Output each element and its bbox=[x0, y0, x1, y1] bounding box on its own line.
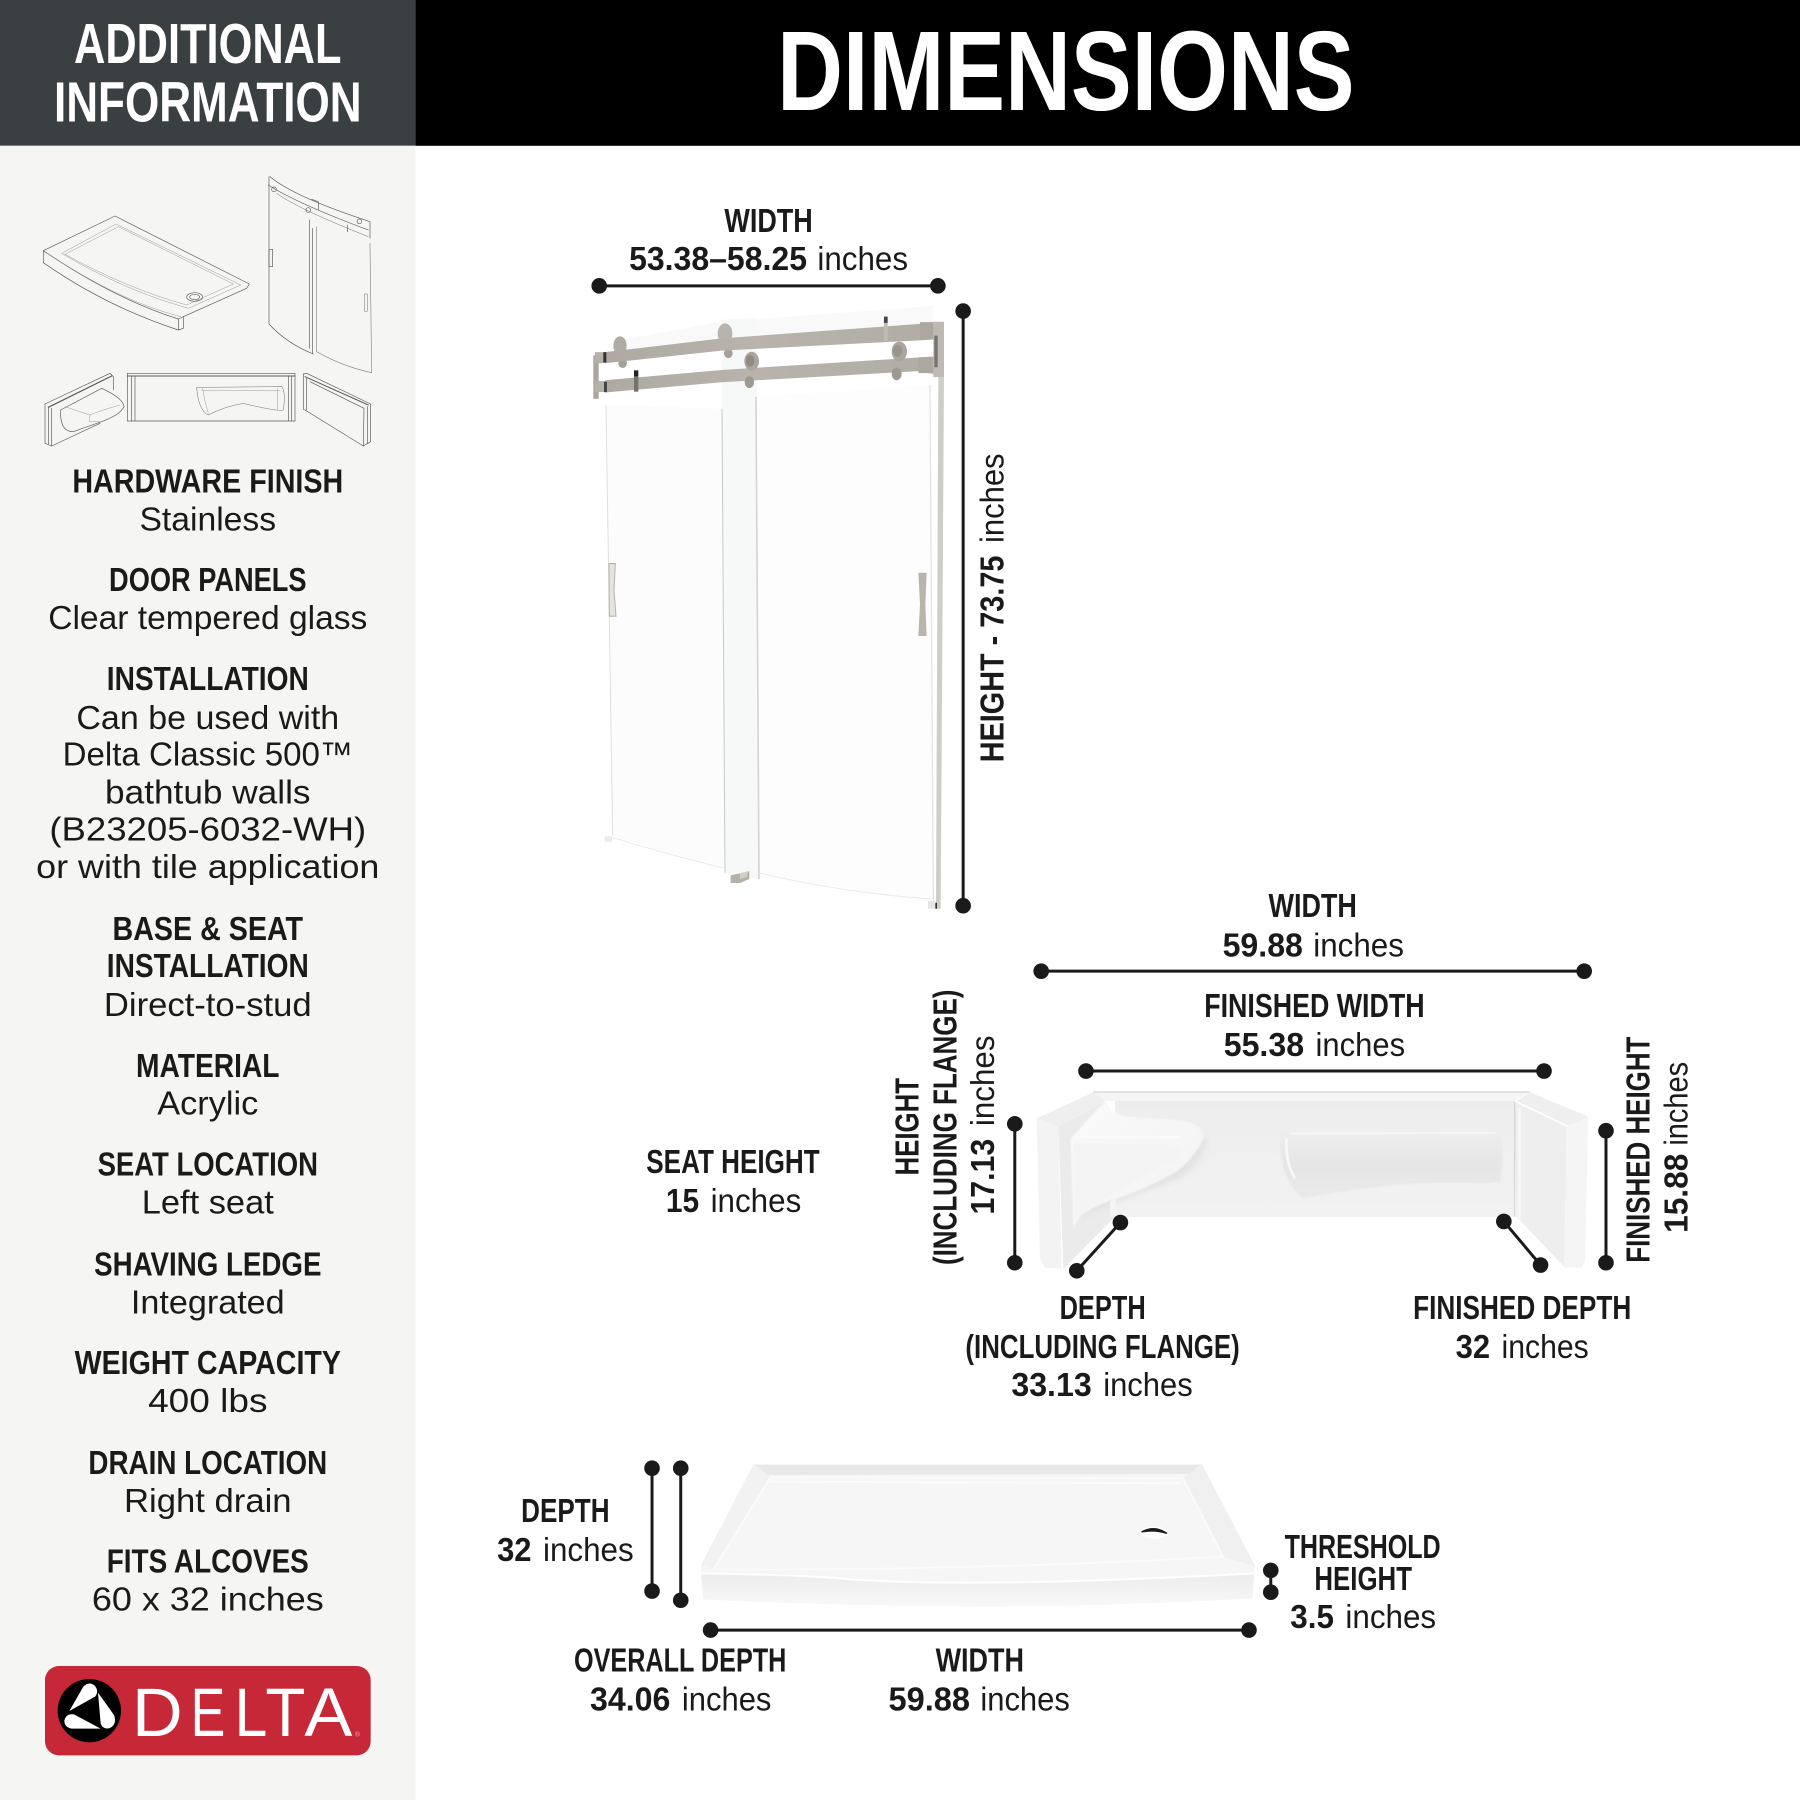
dimension: threshold height: THRESHOLD bbox=[1285, 1529, 1441, 1566]
info: installation: bathtub walls bbox=[105, 775, 311, 812]
dimension: finished height: inches bbox=[1658, 1062, 1695, 1146]
top rails and rollers bbox=[593, 317, 944, 399]
header: dimensions title: DIMENSIONS bbox=[777, 8, 1355, 135]
illustration: shower base bbox=[701, 1464, 1255, 1607]
info: installation: Delta Classic 500™ bbox=[63, 737, 353, 774]
info: material bbox=[136, 1048, 280, 1123]
logo: Delta: T bbox=[265, 1675, 305, 1751]
dimension: door width: WIDTH bbox=[724, 203, 813, 240]
icon: sliding door line drawing bbox=[268, 177, 372, 373]
info: shaving ledge: SHAVING LEDGE bbox=[94, 1246, 321, 1283]
dimension: finished height bbox=[1600, 1037, 1696, 1269]
info: drain location bbox=[88, 1445, 327, 1520]
info: weight capacity: 400 lbs bbox=[148, 1383, 267, 1420]
header: additional information bbox=[0, 0, 416, 146]
drain bbox=[1141, 1527, 1168, 1539]
dimension: depth including flange: 33.13 bbox=[1011, 1367, 1092, 1404]
dimension: door height bbox=[957, 305, 1011, 912]
info: fits alcoves: FITS ALCOVES bbox=[107, 1544, 309, 1581]
dimension: base width: inches bbox=[980, 1681, 1070, 1718]
label: seat height: inches bbox=[711, 1183, 801, 1220]
info: installation: INSTALLATION bbox=[107, 661, 309, 698]
label: seat height: SEAT HEIGHT bbox=[646, 1144, 820, 1181]
logo: Delta: ® bbox=[355, 1731, 360, 1739]
info: base and seat installation bbox=[104, 911, 312, 1024]
dimension: overall depth: inches bbox=[682, 1681, 771, 1718]
dimension: threshold height: 3.5 bbox=[1290, 1599, 1334, 1636]
dimension: depth including flange: (INCLUDING FLANGE) bbox=[965, 1329, 1240, 1366]
info: installation: (B23205-6032-WH) bbox=[49, 811, 366, 848]
logo: Delta: A bbox=[304, 1675, 353, 1751]
dimension: finished depth bbox=[1413, 1215, 1631, 1366]
icon: shower base line drawing bbox=[43, 216, 249, 330]
info: door panels: DOOR PANELS bbox=[109, 562, 307, 599]
dimension: walls width bbox=[1035, 888, 1590, 977]
dimension: door height: HEIGHT - 73.75 bbox=[974, 556, 1011, 762]
info: seat location: SEAT LOCATION bbox=[98, 1147, 318, 1184]
info: base and seat installation: BASE & SEAT bbox=[113, 911, 303, 948]
info: seat location: Left seat bbox=[142, 1184, 274, 1221]
dimension: base depth bbox=[497, 1462, 658, 1597]
dimension: finished width bbox=[1080, 988, 1550, 1077]
icon: left seat wall line drawing bbox=[45, 373, 124, 446]
dimension: depth including flange: DEPTH bbox=[1060, 1290, 1146, 1327]
shaving ledge bbox=[1280, 1130, 1503, 1198]
info: weight capacity bbox=[75, 1345, 341, 1420]
dimension: door width bbox=[593, 203, 944, 292]
bottom guide and corner brackets bbox=[605, 836, 937, 909]
back wall bbox=[1093, 1092, 1530, 1217]
left wall and corner seat bbox=[1037, 1092, 1207, 1269]
info: door panels bbox=[48, 562, 367, 637]
info: seat location bbox=[98, 1147, 318, 1221]
info: base and seat installation: Direct-to-stud bbox=[104, 987, 312, 1024]
dimension: finished depth: 32 bbox=[1456, 1329, 1490, 1366]
dimension: overall depth: 34.06 bbox=[590, 1681, 670, 1718]
header: additional information: INFORMATION bbox=[54, 71, 362, 134]
dimension: walls width: WIDTH bbox=[1268, 888, 1357, 925]
dimension: height including flange: inches bbox=[965, 1035, 1002, 1126]
dimension: base width: WIDTH bbox=[936, 1642, 1024, 1679]
info: drain location: DRAIN LOCATION bbox=[88, 1445, 327, 1482]
info: drain location: Right drain bbox=[124, 1483, 292, 1520]
info: shaving ledge: Integrated bbox=[131, 1284, 285, 1321]
dimension: finished width: 55.38 bbox=[1224, 1027, 1304, 1064]
dimension: finished height: 15.88 bbox=[1658, 1154, 1695, 1233]
illustration: wall set with seat and shelf bbox=[1037, 1092, 1588, 1269]
dimension: threshold height: HEIGHT bbox=[1314, 1561, 1412, 1598]
right wall bbox=[1280, 1092, 1588, 1268]
logo: Delta: L bbox=[235, 1675, 267, 1751]
header: additional information: ADDITIONAL bbox=[74, 12, 342, 75]
logo: Delta: D bbox=[132, 1675, 183, 1751]
info: installation: or with tile application bbox=[36, 849, 379, 886]
dimension: finished height: FINISHED HEIGHT bbox=[1621, 1037, 1658, 1263]
door handles bbox=[609, 564, 927, 636]
illustration: sliding shower door bbox=[593, 306, 944, 909]
dimension: finished width: inches bbox=[1316, 1027, 1405, 1064]
info: door panels: Clear tempered glass bbox=[48, 600, 367, 637]
dimension: door width: 53.38–58.25 bbox=[629, 241, 807, 278]
glass panels bbox=[605, 306, 944, 909]
info: installation bbox=[36, 661, 379, 886]
dimension: depth including flange bbox=[965, 1216, 1240, 1404]
info: fits alcoves: 60 x 32 inches bbox=[92, 1582, 324, 1619]
dimension: finished depth: FINISHED DEPTH bbox=[1413, 1290, 1631, 1327]
info: material: MATERIAL bbox=[136, 1048, 280, 1085]
dimension: height including flange: HEIGHT bbox=[889, 1078, 926, 1176]
logo: Delta bbox=[45, 1666, 371, 1755]
dimension: base width: 59.88 bbox=[889, 1681, 970, 1718]
dimension: threshold height bbox=[1264, 1529, 1441, 1636]
dimension: height including flange bbox=[889, 990, 1021, 1269]
info: hardware finish bbox=[72, 463, 343, 538]
dimension: base depth: 32 bbox=[497, 1532, 532, 1569]
panel: additional information sidebar bbox=[0, 146, 416, 1800]
header: dimensions title bbox=[416, 0, 1800, 146]
label: seat height: 15 bbox=[666, 1183, 699, 1220]
label: seat height bbox=[646, 1144, 820, 1220]
info: weight capacity: WEIGHT CAPACITY bbox=[75, 1345, 341, 1382]
dimension: height including flange: (INCLUDING FLANGE) bbox=[927, 990, 964, 1265]
dimension: walls width: 59.88 bbox=[1223, 927, 1303, 964]
info: base and seat installation: INSTALLATION bbox=[107, 948, 309, 985]
info: material: Acrylic bbox=[157, 1086, 258, 1123]
info: fits alcoves bbox=[92, 1544, 324, 1619]
dimension: overall depth: OVERALL DEPTH bbox=[574, 1642, 786, 1679]
info: shaving ledge bbox=[94, 1246, 321, 1321]
info: hardware finish: HARDWARE FINISH bbox=[72, 463, 343, 500]
dimension: finished width: FINISHED WIDTH bbox=[1204, 988, 1425, 1025]
dimension: finished depth: inches bbox=[1502, 1329, 1589, 1366]
dimension: base width bbox=[704, 1624, 1255, 1718]
dimension: base depth: DEPTH bbox=[521, 1493, 610, 1530]
info: hardware finish: Stainless bbox=[139, 501, 276, 538]
icon: right wall line drawing bbox=[303, 373, 371, 446]
dimension: door width: inches bbox=[817, 241, 908, 278]
dimension: overall depth bbox=[574, 1462, 786, 1718]
dimension: base depth: inches bbox=[543, 1532, 634, 1569]
dimension: door height: inches bbox=[974, 453, 1011, 543]
logo: Delta: E bbox=[191, 1675, 225, 1751]
dimension: depth including flange: inches bbox=[1103, 1367, 1193, 1404]
dimension: walls width: inches bbox=[1313, 927, 1404, 964]
dimension: threshold height: inches bbox=[1345, 1599, 1436, 1636]
dimension: height including flange: 17.13 bbox=[965, 1139, 1002, 1215]
info: installation: Can be used with bbox=[76, 700, 339, 737]
icon: back wall line drawing bbox=[127, 373, 295, 421]
